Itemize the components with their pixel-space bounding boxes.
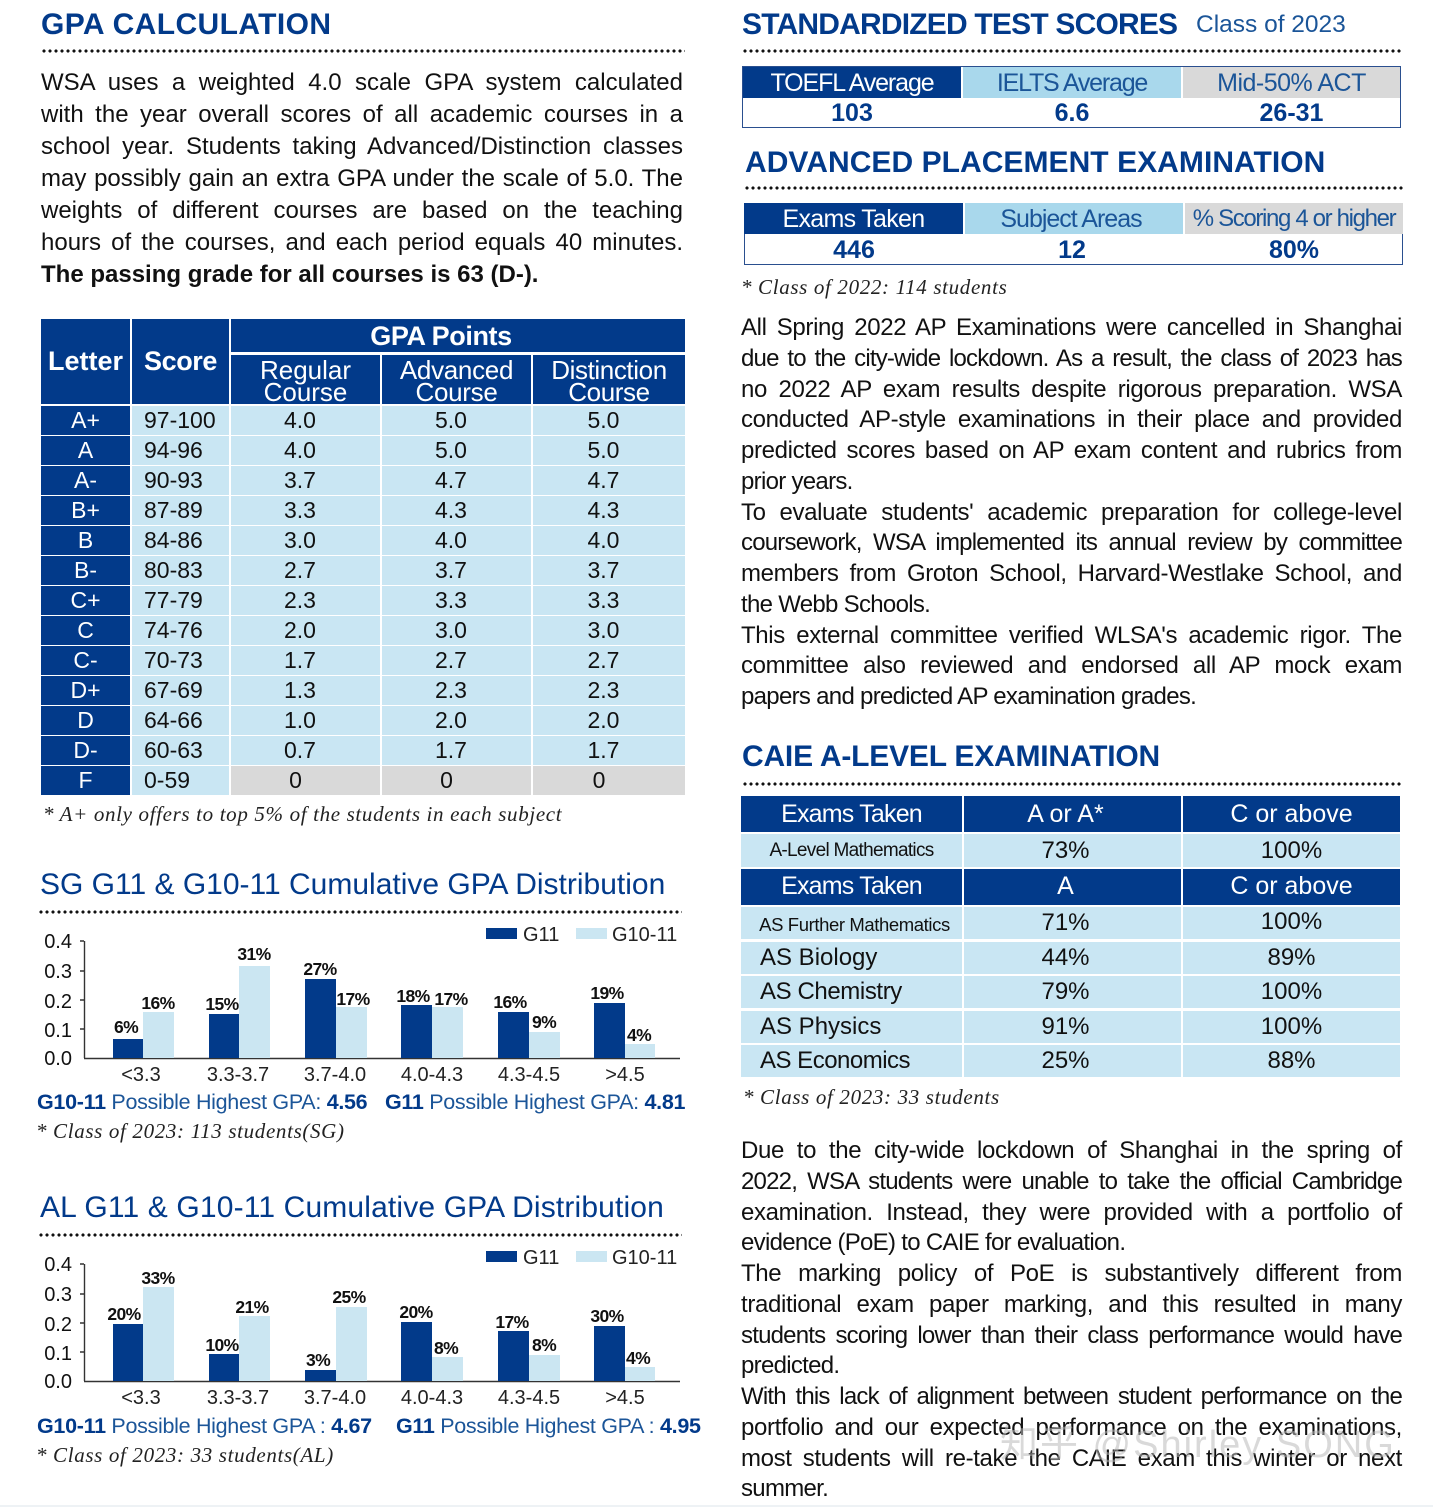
row D-: D- [73,737,98,763]
row C: C [77,617,94,643]
header cell: Regular Course: Regular [260,355,351,385]
row A+: 5.0 [435,407,467,433]
bar chart: SG GPA distribution: 0.0 [44,1048,72,1070]
row A- [41,466,685,495]
row D: 64-66 [144,707,203,733]
row B+: 4.3 [435,497,467,523]
header cell: Score [132,319,229,404]
bar chart: AL GPA distribution: 8% [532,1335,557,1355]
header cell: Distinction Course: Course [568,377,650,407]
row A: 5.0 [435,437,467,463]
row B: 84-86 [144,527,203,553]
text block: AP explanation: members from Groton School, Harvard-Westlake School, and [741,560,1402,587]
value: 80%: 80% [1269,236,1319,264]
row: AS biology: 44% [1041,944,1090,971]
header cell: Regular Course: Course [264,377,347,407]
row C: 3.0 [588,617,619,643]
row C-: 2.7 [435,647,467,673]
row: A-level mathematics: 73% [1041,837,1090,864]
bar chart: SG GPA distribution: G11 Possible Highest GPA: 4.81 [385,1090,686,1114]
text block: CAIE explanation: The marking policy of PoE is substantively different from [741,1260,1402,1287]
text block: GPA explanation: weights of different courses are based on the teaching [41,197,683,224]
row B-: B- [74,557,97,583]
row B [41,526,685,555]
text block: AP explanation: coursework, WSA implemented its annual review by committee [741,529,1402,556]
row: AS chemistry: 100% [1261,978,1322,1005]
bar chart: AL GPA distribution: 17% [495,1312,530,1332]
header row 1: A or A* [1027,800,1104,828]
heading: advanced placement: ADVANCED PLACEMENT EXAMINATION [745,146,1325,179]
text block: CAIE explanation: With this lack of alignment between student performance on the [741,1383,1402,1410]
text block: AP explanation: conducted AP-style examinations in their place and provided [741,406,1402,433]
bar chart: AL GPA distribution: 0.3 [44,1284,72,1306]
text block: CAIE explanation: traditional exam paper marking, and this resulted in many [741,1291,1402,1318]
header cell: Distinction Course [533,355,685,404]
row C+: 77-79 [144,587,203,613]
cell: exams taken: Exams Taken [783,205,924,233]
row: AS physics: 100% [1261,1013,1322,1040]
row C+: 3.3 [588,587,619,613]
bar chart: AL GPA distribution: 10% [205,1335,240,1355]
bar chart: AL GPA distribution: 8% [434,1338,459,1358]
row D+ [41,676,685,705]
row: AS further mathematics: 100% [1261,908,1322,935]
bar chart: SG GPA distribution: 19% [590,983,625,1003]
row: AS physics [741,1011,1400,1043]
row B: 4.0 [588,527,619,553]
bar chart: SG GPA distribution: 31% [237,944,272,964]
row C- [41,646,685,675]
row C-: 70-73 [144,647,203,673]
row B+: 87-89 [144,497,203,523]
text block: GPA explanation: hours of the courses, and each period equals 40 minutes. [41,229,683,256]
header cell: Regular Course [231,355,380,404]
row: AS economics: 25% [1041,1047,1090,1074]
text block: AP explanation: committee also reviewed and endorsed all AP mock exam [741,652,1402,679]
bar chart: SG GPA distribution: <3.3 [121,1064,161,1086]
header row 2 [741,869,1400,905]
footnote: AL: * Class of 2023: 33 students(AL) [36,1443,334,1467]
header cell: Advanced Course: Course [415,377,498,407]
row F: F [78,767,93,793]
table: AP [744,203,1403,265]
footnote: class of 2022: * Class of 2022: 114 students [741,275,1007,299]
bar chart: SG GPA distribution: 0.4 [44,931,72,953]
heading: CAIE A-level: CAIE A-LEVEL EXAMINATION [742,740,1160,773]
bar chart: AL GPA distribution: 0.2 [44,1314,72,1336]
cell: percent scoring: % Scoring 4 or higher [1193,205,1395,232]
cell: TOEFL: TOEFL Average [770,69,934,97]
row: AS chemistry: 79% [1041,978,1090,1005]
bar chart: AL GPA distribution: G11 Possible Highest GPA : 4.95 [396,1414,701,1438]
row: AS biology: AS Biology [760,944,877,971]
value: 103: 103 [831,99,873,127]
text block: GPA explanation: with the year overall scores of all academic courses in a [41,101,683,128]
bar chart: AL GPA distribution: 4.3-4.5 [498,1387,560,1409]
row B+: 4.3 [588,497,619,523]
text block: GPA explanation: may possibly gain an extra GPA under the scale of 5.0. The [41,165,683,192]
subheading: class of 2023: Class of 2023 [1196,11,1346,38]
text block: AP explanation: due to the city-wide lockdown. As a result, the class of 2023 has [741,345,1402,372]
row C: 2.0 [284,617,316,643]
row D-: 1.7 [588,737,619,763]
bar chart: AL GPA distribution: 25% [332,1287,367,1307]
text block: AP explanation: predicted scores based on AP exam content and rubrics from [741,437,1402,464]
text block: AP explanation: no 2022 AP exam results despite rigorous preparation. WSA [741,376,1402,402]
row C+: 2.3 [284,587,316,613]
header cell: GPA Points: GPA Points [370,321,512,351]
bar chart: SG GPA distribution: 4.3-4.5 [498,1064,560,1086]
bar chart: AL GPA distribution: <3.3 [121,1387,161,1409]
row D- [41,736,685,765]
row C-: 2.7 [588,647,619,673]
bar chart: SG GPA distribution: 6% [114,1017,139,1037]
row: AS economics [741,1045,1400,1077]
row: AS physics: 91% [1041,1013,1090,1040]
bar chart: AL GPA distribution: 0.4 [44,1254,72,1276]
heading: AL chart title: AL G11 & G10-11 Cumulative GPA Distribution [40,1191,664,1224]
row C+: 3.3 [435,587,467,613]
bar chart: SG GPA distribution: G10-11 Possible Highest GPA: 4.56 [37,1090,368,1114]
text block: CAIE explanation: evidence (PoE) to CAIE for evaluation. [741,1229,1125,1256]
header cell: Score: Score [144,346,217,376]
row: AS chemistry: AS Chemistry [760,978,902,1005]
bar chart: SG GPA distribution: 16% [141,993,176,1013]
value: 446: 446 [833,236,875,264]
value: 26-31: 26-31 [1260,99,1323,127]
bar chart: AL GPA distribution: 33% [141,1268,176,1288]
cell: TOEFL [743,67,961,98]
row: A-level mathematics: A-Level Mathematics [769,840,934,861]
text block: CAIE explanation: portfolio and our expected performance on the examinations, [741,1414,1402,1441]
row A: 4.0 [284,437,316,463]
row B- [41,556,685,585]
header cell: Advanced Course: Advanced [400,355,513,385]
text block: AP explanation [741,314,1402,710]
bar chart: AL GPA distribution: G10-11 Possible Highest GPA : 4.67 [37,1414,372,1438]
cell: IELTS: IELTS Average [997,69,1147,97]
text block: GPA explanation: school year. Students taking Advanced/Distinction classes [41,133,683,160]
row D: 2.0 [588,707,619,733]
row B: 3.0 [284,527,316,553]
text block: GPA explanation: The passing grade for all courses is 63 (D-). [41,261,538,288]
bar chart: AL GPA distribution: 0.0 [44,1371,72,1393]
row D-: 60-63 [144,737,203,763]
bar chart: SG GPA distribution [37,924,686,1114]
bar chart: SG GPA distribution: 4.0-4.3 [401,1064,463,1086]
text block: CAIE explanation: predicted. [741,1352,839,1379]
row: AS further mathematics: AS Further Mathematics [759,914,950,935]
row C [41,616,685,645]
row B-: 80-83 [144,557,203,583]
text block: GPA explanation: WSA uses a weighted 4.0 scale GPA system calculated [41,69,683,96]
text block: CAIE explanation: examination. Instead, they were provided with a portfolio of [741,1198,1402,1226]
header row 2: C or above [1230,872,1353,900]
row D: 2.0 [435,707,467,733]
table: CAIE results [741,796,1400,1077]
row: AS further mathematics [741,907,1400,939]
footnote: class of 2023: * Class of 2023: 33 students [743,1085,1000,1109]
row: AS physics: AS Physics [760,1013,881,1040]
row: AS biology: 89% [1267,944,1316,971]
heading: SG chart title: SG G11 & G10-11 Cumulative GPA Distribution [40,868,665,901]
text block: GPA explanation [41,69,683,288]
footnote: SG: * Class of 2023: 113 students(SG) [36,1119,345,1143]
row C: 74-76 [144,617,203,643]
cell: exams taken [744,203,963,234]
header cell: Advanced Course [382,355,531,404]
bar chart: AL GPA distribution: 30% [590,1306,625,1326]
text block: AP explanation: To evaluate students' academic preparation for college-level [741,498,1402,526]
bar chart: AL GPA distribution: 4.0-4.3 [401,1387,463,1409]
row: A-level mathematics: 100% [1261,837,1322,864]
cell: ACT [1183,67,1400,98]
row A-: A- [74,467,97,493]
row A+: A+ [71,407,100,433]
bar chart: SG GPA distribution: 16% [493,992,528,1012]
header cell: GPA Points [231,319,685,352]
text block: AP explanation: All Spring 2022 AP Examinations were cancelled in Shanghai [741,314,1402,341]
bar chart: AL GPA distribution: 0.1 [44,1343,72,1365]
bar chart: SG GPA distribution: 3.3-3.7 [207,1064,269,1086]
row: AS biology [741,942,1400,974]
row F: 0 [593,767,605,793]
row: A-level mathematics [741,834,1400,867]
row F: 0 [289,767,302,793]
row A-: 90-93 [144,467,203,493]
row B-: 3.7 [435,557,467,583]
row A+ [41,406,685,435]
cell: subject areas [965,203,1183,234]
row F: 0-59 [144,767,190,793]
row B+ [41,496,685,525]
row D+: D+ [70,677,101,703]
bar chart: SG GPA distribution: 4% [627,1025,652,1045]
bar chart: AL GPA distribution [37,1247,701,1438]
row: AS economics: AS Economics [760,1047,910,1074]
row B-: 2.7 [284,557,316,583]
watermark: 知乎 @Shirley SONG [1000,1424,1396,1466]
heading: GPA calculation: GPA CALCULATION [41,8,331,41]
header row 2: Exams Taken [781,872,922,900]
row D+: 67-69 [144,677,203,703]
text block: CAIE explanation: most students will re-take the CAIE exam this winter or next [741,1444,1402,1472]
table: test scores [742,66,1401,128]
row A-: 4.7 [435,467,467,493]
bar chart: SG GPA distribution: 18% [396,986,431,1006]
cell: subject areas: Subject Areas [1000,205,1142,233]
row A [41,436,685,465]
text block: AP explanation: prior years. [741,468,853,495]
row A: A [78,437,93,463]
cell: IELTS [963,67,1181,98]
row B: 4.0 [435,527,467,553]
row D+: 1.3 [284,677,316,703]
heading: standardized test scores: STANDARDIZED TEST SCORES [742,8,1177,41]
row C-: C- [73,647,98,673]
bar chart: AL GPA distribution: 3.7-4.0 [304,1387,366,1409]
bar chart: SG GPA distribution: 0.2 [44,991,72,1013]
text block: AP explanation: the Webb Schools. [741,591,930,618]
bar chart: AL GPA distribution: 3% [306,1350,331,1370]
row F [41,766,685,795]
bar chart: AL GPA distribution: G11 [523,1247,559,1269]
table: GPA points by letter grade [41,319,685,795]
row A-: 4.7 [588,467,619,493]
row A: 94-96 [144,437,203,463]
bar chart: SG GPA distribution: 27% [303,959,338,979]
bar chart: AL GPA distribution: 20% [107,1304,142,1324]
bar chart: AL GPA distribution: G10-11 [612,1247,677,1269]
bar chart: AL GPA distribution: 21% [235,1297,270,1317]
bar chart: AL GPA distribution: 20% [399,1302,434,1322]
row C+ [41,586,685,615]
bar chart: SG GPA distribution: 9% [532,1012,557,1032]
row C: 3.0 [435,617,467,643]
header cell: Letter: Letter [48,346,123,376]
row F: 0 [440,767,453,793]
row B: B [78,527,93,553]
row D-: 0.7 [284,737,316,763]
row A+: 4.0 [284,407,316,433]
bar chart: SG GPA distribution: 0.1 [44,1020,72,1042]
value: 6.6: 6.6 [1055,99,1089,127]
bar chart: SG GPA distribution: 0.3 [44,961,72,983]
row B-: 3.7 [588,557,619,583]
value: 12: 12 [1058,236,1086,264]
row: AS further mathematics: 71% [1041,909,1090,936]
header row 1 [741,796,1400,832]
row B+: 3.3 [284,497,316,523]
bar chart: SG GPA distribution: G11 [523,924,559,946]
cell: ACT: Mid-50% ACT [1217,69,1366,97]
header row 1: C or above [1230,800,1353,828]
bar chart: SG GPA distribution: >4.5 [605,1064,645,1086]
row D-: 1.7 [435,737,467,763]
row D+: 2.3 [435,677,467,703]
bar chart: SG GPA distribution: G10-11 [612,924,677,946]
bar chart: AL GPA distribution: 4% [626,1348,651,1368]
bar chart: SG GPA distribution: 17% [434,989,469,1009]
footnote: A+: * A+ only offers to top 5% of the students in each subject [43,802,562,826]
text block: CAIE explanation: 2022, WSA students were unable to take the official Cambridge [741,1168,1402,1195]
bar chart: AL GPA distribution: >4.5 [605,1387,645,1409]
header row 2: A [1057,872,1074,900]
header row 1: Exams Taken [781,800,922,828]
text block: CAIE explanation: Due to the city-wide lockdown of Shanghai in the spring of [741,1137,1402,1164]
text block: AP explanation: papers and predicted AP examination grades. [741,683,1196,710]
row D+: 2.3 [588,677,619,703]
bar chart: AL GPA distribution: 3.3-3.7 [207,1387,269,1409]
row D [41,706,685,735]
header cell: Distinction Course: Distinction [551,355,667,385]
row A-: 3.7 [284,467,316,493]
text block: CAIE explanation: students scoring lower than their class performance would have [741,1322,1402,1348]
row D: 1.0 [284,707,316,733]
row D: D [77,707,94,733]
bar chart: SG GPA distribution: 17% [336,989,371,1009]
header cell: Letter [41,319,130,404]
row: AS chemistry [741,976,1400,1008]
row C+: C+ [70,587,101,613]
text block: CAIE explanation: summer. [741,1475,828,1502]
row: AS economics: 88% [1267,1047,1316,1074]
text block: CAIE explanation [741,1137,1402,1502]
row A+: 5.0 [588,407,619,433]
row C-: 1.7 [284,647,316,673]
bar chart: SG GPA distribution: 15% [205,994,240,1014]
text block: AP explanation: This external committee verified WLSA's academic rigor. The [741,622,1402,648]
row A: 5.0 [588,437,619,463]
row A+: 97-100 [144,407,216,433]
row B+: B+ [71,497,100,523]
bar chart: SG GPA distribution: 3.7-4.0 [304,1064,366,1086]
